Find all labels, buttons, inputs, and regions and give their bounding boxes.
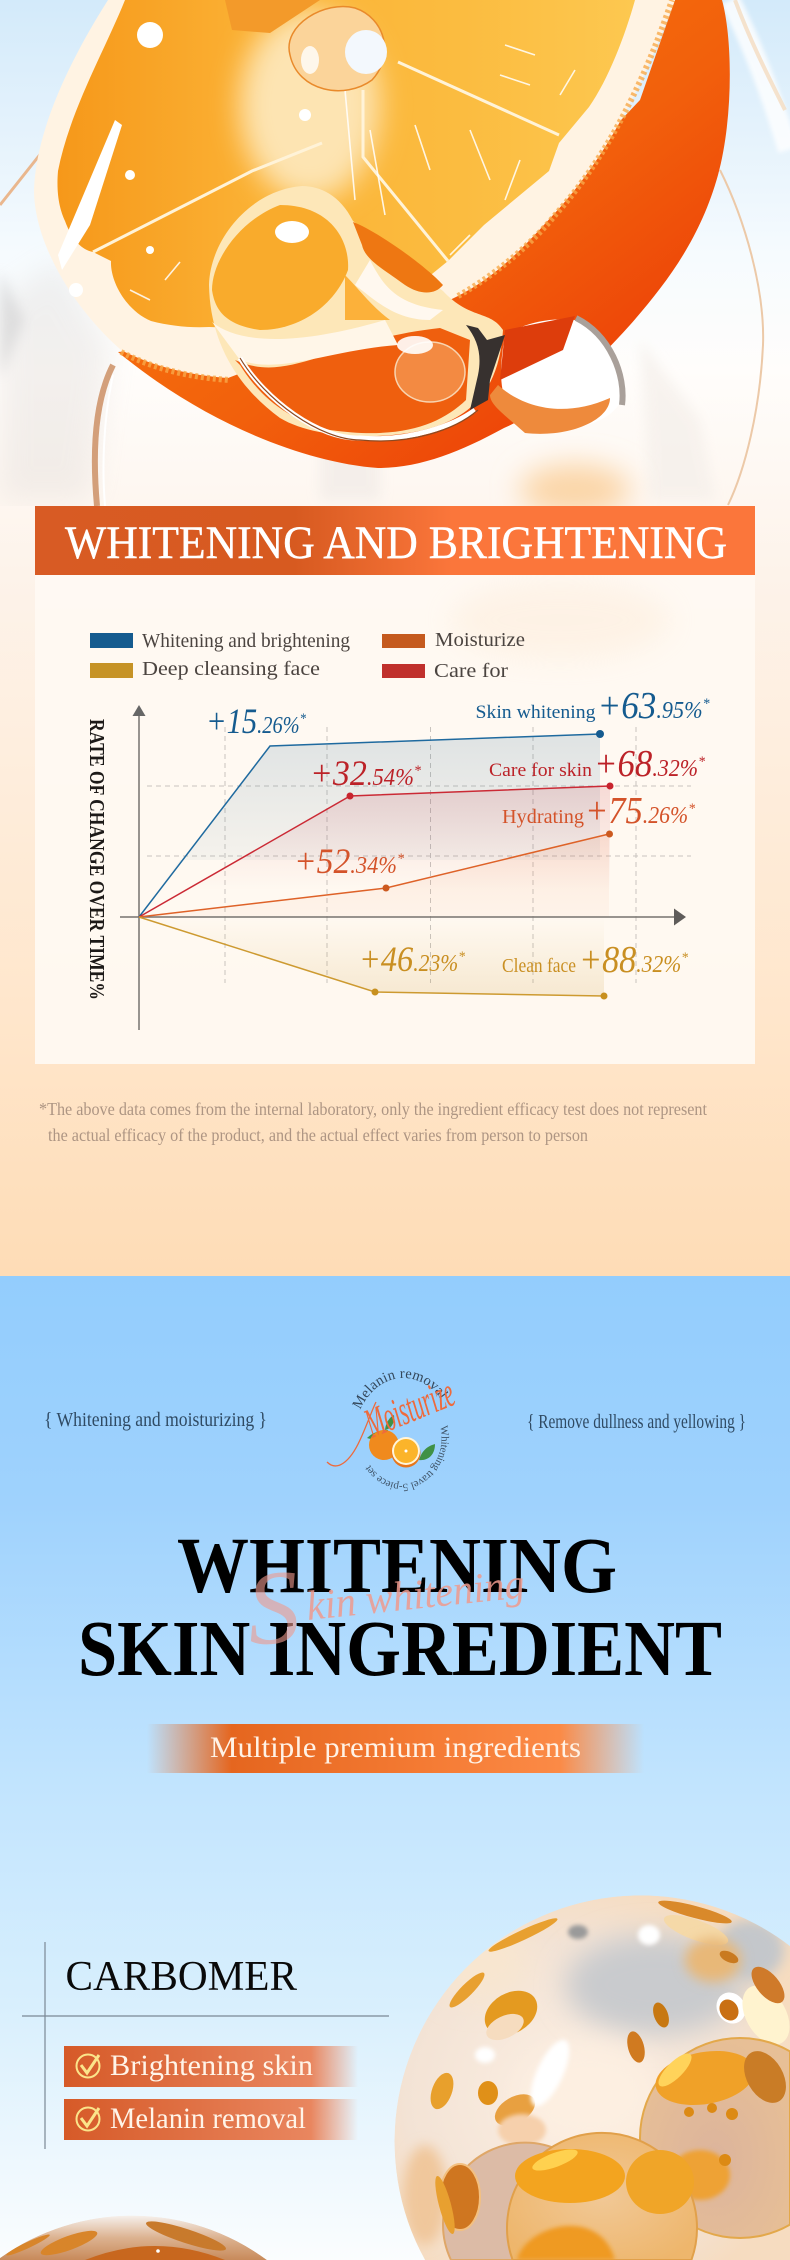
- script overlay: S: [242, 1547, 304, 1668]
- icon: orange slice: [392, 1437, 420, 1468]
- label: hydrating: Hydrating: [502, 806, 584, 828]
- flesh highlights: [58, 22, 311, 297]
- label: care for skin: +68.32%: [594, 743, 702, 785]
- label: care for skin: Care for skin: [489, 760, 593, 781]
- main heading: [78, 1523, 722, 1693]
- legend: Deep cleansing face: [142, 658, 320, 680]
- central juice drop: [225, 0, 387, 91]
- label: +46.23%: *: [458, 949, 465, 965]
- benefit: brightening skin: Brightening skin: [110, 2049, 313, 2082]
- icon: orange: [369, 1430, 399, 1460]
- series: clean face: [139, 917, 608, 1000]
- series: hydrating: [139, 830, 613, 917]
- label: clean face: +88.32%: [579, 939, 686, 981]
- benefit: melanin removal: [64, 2099, 358, 2140]
- logo: Whitening travel 5-piece set: [366, 1425, 450, 1492]
- footnote: the actual efficacy of the product, and the actual effect varies from person to person: [48, 1125, 588, 1145]
- blurred glass background: [0, 0, 788, 516]
- label: hydrating: *: [688, 801, 695, 817]
- footnote: [39, 1099, 707, 1145]
- data labels: [206, 685, 710, 981]
- label: +52.34%: *: [397, 851, 404, 867]
- background: lower section: [0, 1276, 790, 2260]
- subtitle ribbon: [147, 1724, 644, 1773]
- axes: [120, 712, 676, 1030]
- bubble left: [435, 2142, 552, 2260]
- series: skin whitening: [139, 730, 604, 917]
- tagline left: { Whitening and moisturizing }: [44, 1409, 267, 1431]
- benefit: melanin removal: Melanin removal: [110, 2102, 306, 2135]
- main heading: WHITENING: [177, 1523, 617, 1610]
- orange rind: [118, 0, 730, 468]
- illustration: large ingredient sphere: [395, 1895, 790, 2260]
- orange flesh: [57, 0, 635, 330]
- label: skin whitening: Skin whitening: [476, 702, 596, 723]
- label: skin whitening: [476, 685, 710, 727]
- script overlay: [242, 1547, 527, 1668]
- bubble right: [640, 2038, 790, 2238]
- script overlay: kin whitening: [304, 1561, 527, 1630]
- legend: Care for: [434, 660, 508, 682]
- legend: Moisturize: [435, 629, 525, 651]
- label: +32.54%: *: [414, 763, 421, 779]
- main heading: SKIN INGREDIENT: [78, 1606, 722, 1693]
- background: top section: [0, 0, 790, 1276]
- script wordmark: Moisturize: [358, 1370, 461, 1447]
- series fills: [139, 734, 610, 996]
- flesh lighter centre: [240, 10, 380, 200]
- legend: [90, 629, 525, 682]
- panel: chart card: [35, 575, 755, 1064]
- icon: leaves: [367, 1415, 435, 1460]
- logo: [326, 1370, 461, 1492]
- label: care for skin: *: [698, 754, 705, 770]
- subtitle ribbon: Multiple premium ingredients: [210, 1731, 581, 1764]
- ingredient block: carbomer: CARBOMER: [66, 1954, 297, 2000]
- label: hydrating: +75.26%: [585, 790, 693, 832]
- illustration: small sphere: [0, 2216, 267, 2260]
- orange pith: [34, 0, 675, 378]
- label: hydrating: [502, 790, 695, 832]
- heading bar: WHITENING AND BRIGHTENING: [65, 517, 727, 569]
- line chart: [120, 705, 691, 1030]
- ring loop: [466, 316, 623, 434]
- series: care for skin: [139, 782, 614, 917]
- illustration: sliced orange with droplet: [0, 0, 788, 516]
- label: +15.26%: *: [300, 711, 306, 727]
- label: care for skin: [489, 743, 705, 785]
- benefit: brightening skin: [64, 2046, 358, 2087]
- label: clean face: Clean face: [502, 955, 576, 977]
- segment dividers: [93, 62, 559, 261]
- large droplet: [209, 186, 503, 441]
- inner flecks: [426, 1896, 790, 2146]
- label: +15.26%: +15.26%: [206, 701, 307, 741]
- bubble middle: [507, 2133, 697, 2260]
- label: clean face: [502, 939, 688, 981]
- label: clean face: *: [681, 950, 688, 966]
- label: skin whitening: *: [703, 696, 710, 712]
- footnote: *The above data comes from the internal laboratory, only the ingredient efficacy test does not represent: [39, 1099, 707, 1119]
- logo: Melanin removal: [352, 1371, 448, 1410]
- label: skin whitening: +63.95%: [598, 685, 706, 727]
- label: +46.23%: +46.23%: [359, 939, 463, 979]
- label: +32.54%: +32.54%: [310, 753, 417, 793]
- ingredient block: carbomer: [22, 1942, 389, 2149]
- label: +52.34%: +52.34%: [294, 841, 400, 881]
- legend: Whitening and brightening: [142, 630, 350, 652]
- y-axis label: RATE OF CHANGE OVER TIME%: [85, 719, 109, 1000]
